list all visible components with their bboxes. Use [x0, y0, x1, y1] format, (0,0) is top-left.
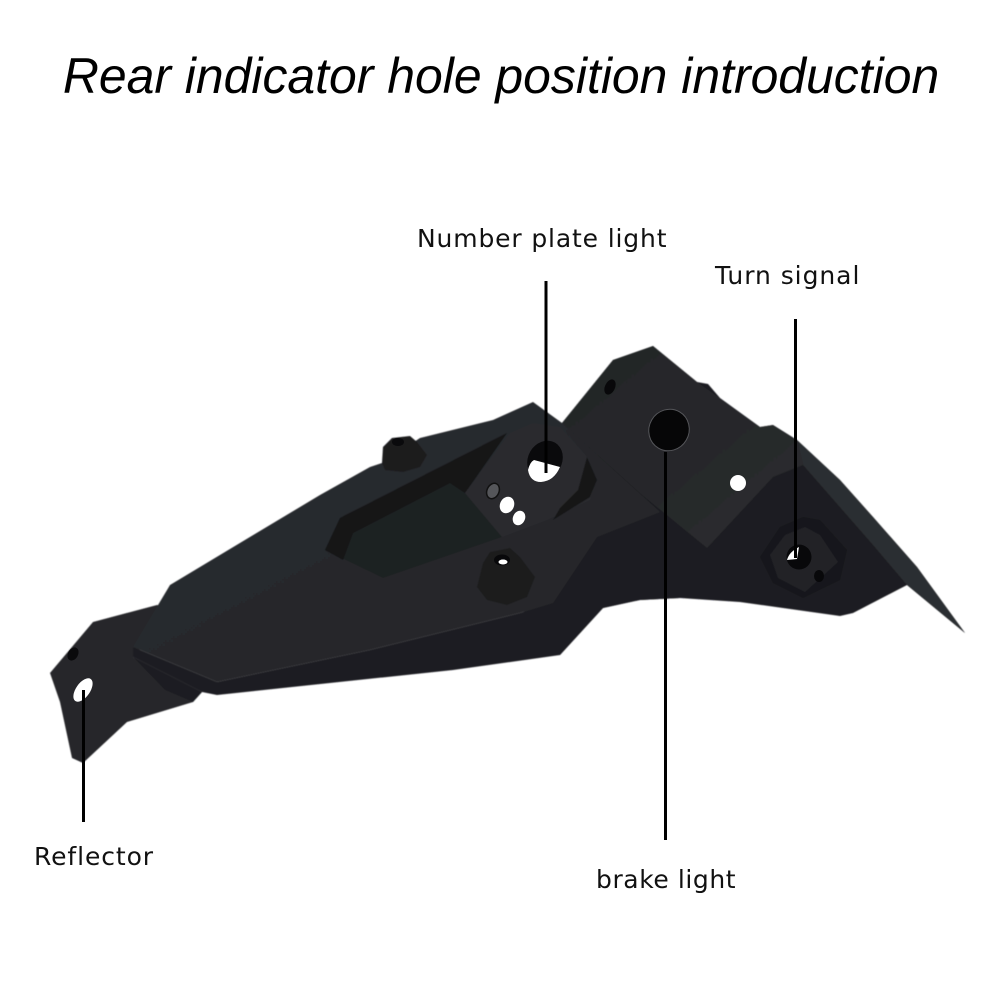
upper panel: [562, 346, 803, 548]
boss left: [382, 436, 427, 472]
title: Rear indicator hole position introduction: [63, 48, 939, 104]
right edge strip: [797, 440, 965, 633]
holes: [65, 378, 824, 705]
hole: reflector: [70, 675, 96, 705]
label: number plate light: Number plate light: [417, 224, 667, 253]
label: brake light: brake light: [596, 865, 736, 894]
hole: plate small one: [497, 494, 517, 516]
boss centre: [477, 548, 535, 605]
hole: plate grey: [484, 481, 502, 501]
hole: boss left: [392, 438, 404, 446]
leader line: reflector: [82, 690, 85, 822]
leader line: number plate light: [544, 281, 548, 473]
left reflector tab: [50, 605, 202, 763]
plate recess wall: [325, 433, 507, 560]
bracket body: [50, 346, 965, 763]
turn signal mount outer: [760, 517, 847, 598]
label: turn signal: Turn signal: [715, 261, 860, 290]
hole: number plate light: [520, 434, 570, 486]
label: reflector: Reflector: [34, 842, 154, 871]
plate side shadow: [553, 457, 597, 520]
lower band: [133, 512, 707, 695]
hole: brake light: [641, 402, 697, 458]
hole opening: number plate light: [528, 460, 560, 482]
light mounting plate: [465, 423, 597, 537]
plate recess floor: [325, 433, 507, 578]
hole: tab screw: [65, 645, 81, 663]
hole: plate small two: [510, 509, 528, 527]
hole: boss centre: [494, 554, 510, 566]
leader line: brake light: [664, 452, 667, 840]
turn signal mount inner: [770, 527, 838, 592]
rear upper section base: [520, 346, 965, 655]
leader line: turn signal: [794, 319, 797, 558]
hole opening: turn signal: [787, 547, 799, 560]
tab shadow under main panel: [133, 657, 202, 702]
hole: small upper panel: [730, 475, 746, 491]
hole: upper panel screw: [602, 378, 618, 396]
hole: turn signal screw: [814, 570, 824, 582]
hole: turn signal: [786, 544, 812, 570]
main panel: [133, 402, 660, 682]
hole opening: boss centre: [498, 560, 508, 564]
